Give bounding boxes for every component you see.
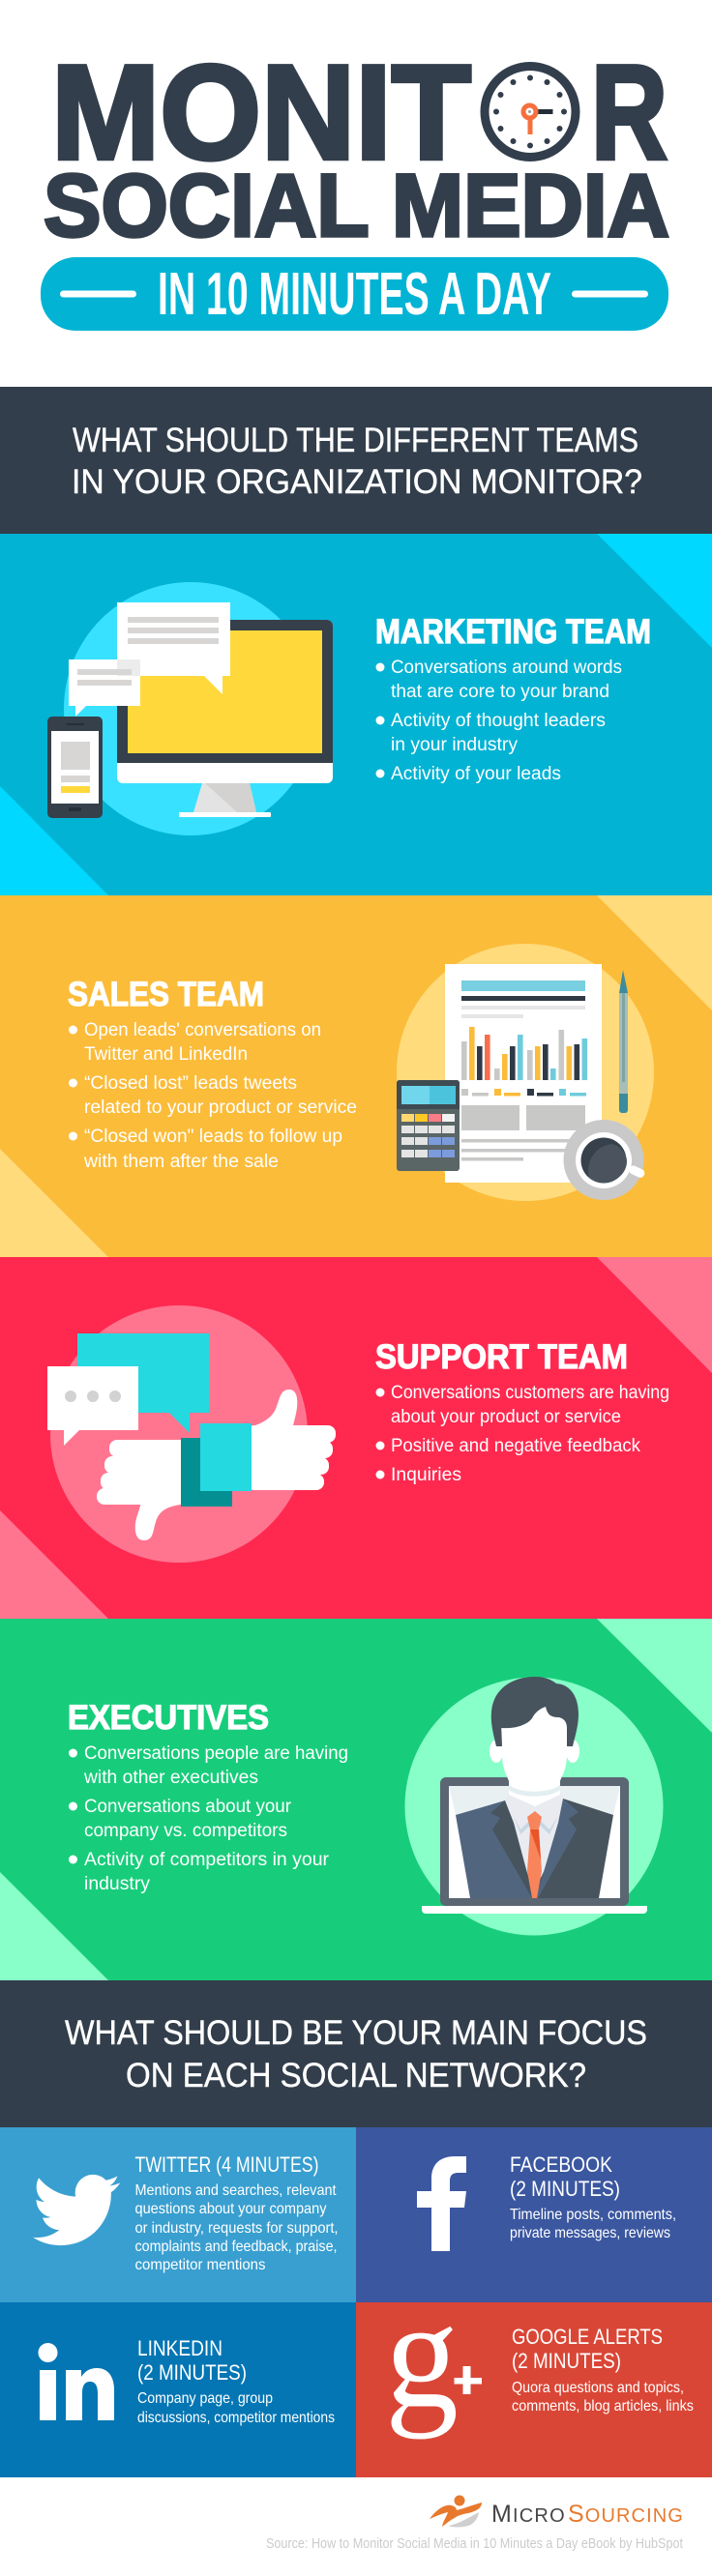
- text: twitter focus: competitor mentions: [135, 2257, 265, 2273]
- panel: executives: [0, 1619, 712, 1980]
- icon: laptop with executive: [422, 1677, 647, 1914]
- list: sales bullets: Open leads' conversations on: [84, 1020, 321, 1040]
- list: sales bullets: “Closed lost” leads tweets: [84, 1073, 297, 1094]
- heading: support team: SUPPORT TEAM: [375, 1338, 628, 1376]
- heading: executives: EXECUTIVES: [68, 1699, 269, 1737]
- list: executives bullets: Activity of competitors in your: [84, 1850, 330, 1870]
- text: twitter focus: TWITTER (4 MINUTES): [135, 2152, 319, 2177]
- text: facebook focus: private messages, reviews: [510, 2225, 670, 2241]
- icon: desktop monitor: [117, 620, 333, 817]
- icon: teal speech bubble: [77, 1333, 209, 1433]
- text: facebook focus: Timeline posts, comments,: [510, 2207, 676, 2223]
- logo: MicroSourcing: SOURCING: [568, 2501, 684, 2528]
- text: twitter focus: complaints and feedback, praise,: [135, 2239, 337, 2255]
- list: support bullets: Inquiries: [391, 1465, 461, 1485]
- text: google alerts focus: GOOGLE ALERTS: [512, 2325, 663, 2349]
- icon: pen: [619, 970, 628, 1113]
- title: Monitor Social Media: R: [591, 38, 668, 188]
- list: executives bullets: Conversations people are having: [84, 1743, 348, 1764]
- list: sales bullets: “Closed won" leads to follow up: [84, 1127, 342, 1147]
- logo: MicroSourcing: MICRO: [491, 2501, 566, 2528]
- list: support bullets: Positive and negative feedback: [391, 1436, 640, 1456]
- list: support bullets: about your product or service: [391, 1407, 621, 1427]
- icon: linkedin in: [38, 2343, 114, 2420]
- list: sales bullets: with them after the sale: [83, 1152, 279, 1172]
- list: marketing bullets: Activity of thought leaders: [391, 711, 606, 731]
- text: facebook focus: (2 MINUTES): [510, 2177, 620, 2201]
- text: twitter focus: or industry, requests for support,: [135, 2220, 339, 2237]
- band: social network question: WHAT SHOULD BE YOUR MAIN FOCUS: [65, 2014, 647, 2052]
- text: linkedin focus: [137, 2336, 335, 2426]
- band: social network question: ON EACH SOCIAL NETWORK?: [126, 2057, 586, 2094]
- icon: thumbs up: [200, 1390, 336, 1491]
- heading: sales team: SALES TEAM: [68, 976, 264, 1013]
- heading: marketing team: MARKETING TEAM: [375, 613, 651, 651]
- list: executives bullets: company vs. competitors: [84, 1821, 287, 1841]
- text: twitter focus: questions about your company: [135, 2201, 327, 2217]
- list: sales bullets: Twitter and LinkedIn: [84, 1044, 248, 1065]
- icon: small speech bubble: [69, 659, 140, 717]
- text: google alerts focus: (2 MINUTES): [512, 2349, 621, 2373]
- text: linkedin focus: LINKEDIN: [137, 2336, 222, 2360]
- panel: facebook: [356, 2127, 712, 2302]
- list: sales bullets: related to your product or service: [84, 1098, 357, 1118]
- list: executives bullets: Conversations about your: [84, 1797, 292, 1817]
- text: google alerts focus: [512, 2325, 694, 2415]
- panel: twitter: [0, 2127, 356, 2302]
- text: linkedin focus: (2 MINUTES): [137, 2360, 247, 2385]
- icon: twitter bird: [33, 2175, 120, 2245]
- list: marketing bullets: [375, 658, 622, 784]
- logo: MicroSourcing: [430, 2495, 684, 2528]
- list: executives bullets: with other executives: [83, 1768, 258, 1788]
- text: linkedin focus: Company page, group: [137, 2390, 273, 2407]
- icon: google plus: g: [385, 2268, 459, 2440]
- list: support bullets: Conversations customers are having: [391, 1383, 669, 1403]
- band: different teams question: WHAT SHOULD THE DIFFERENT TEAMS: [73, 422, 638, 459]
- icon: calculator: [397, 1080, 460, 1171]
- text: google alerts focus: comments, blog articles, links: [512, 2398, 694, 2415]
- panel: google alerts: [356, 2268, 712, 2477]
- panel: sales team: [0, 895, 712, 1257]
- icon: coffee cup: [563, 1120, 646, 1200]
- list: sales bullets: [69, 1020, 357, 1172]
- icon: logo swoosh: [430, 2495, 482, 2528]
- text: facebook focus: FACEBOOK: [510, 2152, 612, 2177]
- list: marketing bullets: that are core to your brand: [391, 682, 609, 702]
- text: twitter focus: Mentions and searches, relevant: [135, 2182, 337, 2199]
- text: facebook focus: [510, 2152, 676, 2241]
- text: google alerts focus: Quora questions and topics,: [512, 2380, 684, 2396]
- text: twitter focus: [135, 2152, 339, 2273]
- panel: marketing team: [0, 534, 712, 895]
- title: Monitor Social Media: O: [487, 41, 574, 188]
- panel: linkedin: [0, 2302, 356, 2477]
- title: Monitor Social Media: MONIT: [51, 38, 471, 188]
- icon: phone: [47, 717, 103, 818]
- icon: thumbs down: [97, 1438, 232, 1540]
- list: marketing bullets: Activity of your leads: [391, 764, 561, 784]
- band: different teams question: IN YOUR ORGANIZATION MONITOR?: [72, 463, 642, 501]
- band: social network question: [0, 1980, 712, 2127]
- list: executives bullets: [69, 1743, 348, 1894]
- text: linkedin focus: discussions, competitor mentions: [137, 2410, 335, 2426]
- list: marketing bullets: Conversations around words: [391, 658, 622, 678]
- list: executives bullets: industry: [84, 1874, 151, 1894]
- band: different teams question: [0, 387, 712, 534]
- icon: report page with bar chart: [445, 964, 602, 1183]
- icon: large speech bubble: [117, 602, 230, 694]
- icon: facebook f: [417, 2156, 466, 2251]
- list: marketing bullets: in your industry: [391, 735, 518, 755]
- subtitle pill: in 10 minutes a day: [41, 257, 668, 331]
- title: Monitor Social Media: [44, 38, 669, 255]
- title: Monitor Social Media: SOCIAL MEDIA: [44, 157, 669, 255]
- list: support bullets: [375, 1383, 669, 1485]
- icon: clock: [480, 62, 580, 161]
- panel: support team: [0, 1257, 712, 1619]
- icon: white speech bubble: [47, 1366, 138, 1446]
